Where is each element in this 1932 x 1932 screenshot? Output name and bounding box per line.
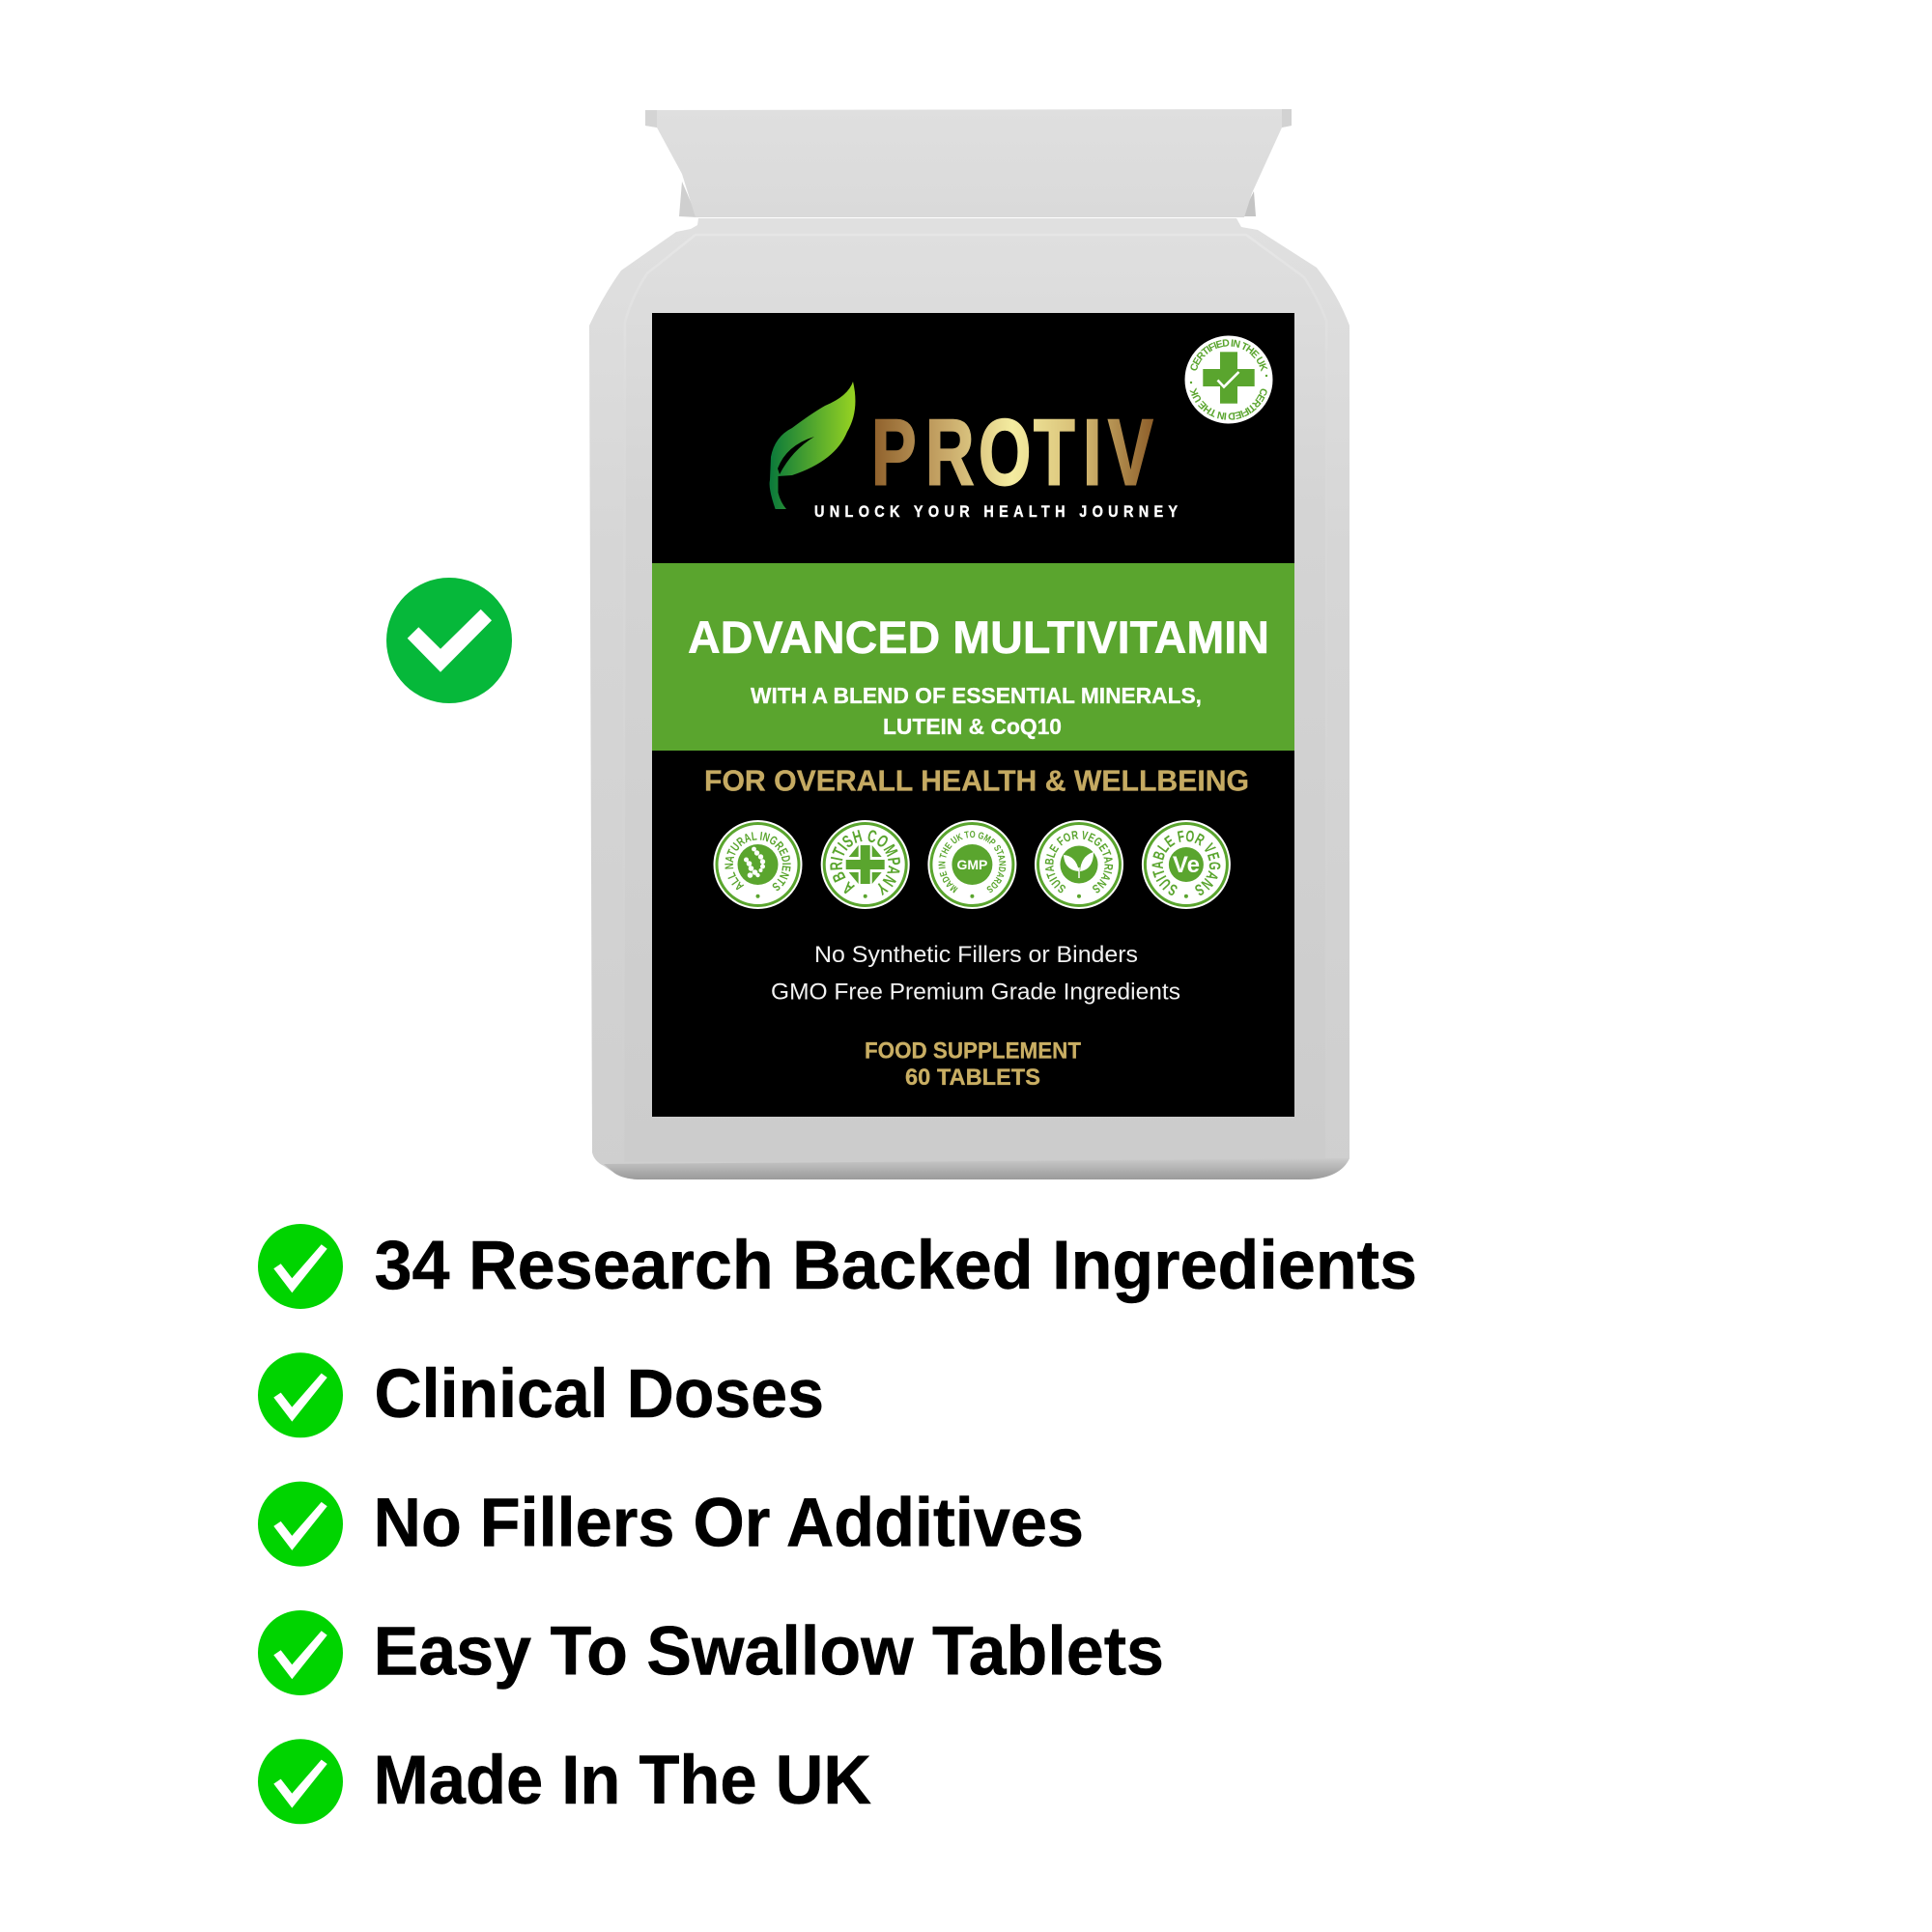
benefit: made in the uk: Made In The UK [373,1743,871,1819]
certified seal: CERTIFIED IN THE UK [1190,339,1267,372]
product bottle [589,109,1350,1179]
benefit: clinical doses [258,1352,824,1437]
product subtitle: LUTEIN & CoQ10 [883,714,1062,739]
claims text: GMO Free Premium Grade Ingredients [771,980,1180,1005]
seal: made in the uk to gmp standards [927,820,1016,909]
top check icon [386,578,512,703]
benefit: research backed ingredients: 34 Research Backed Ingredients [375,1228,1417,1304]
claims text: No Synthetic Fillers or Binders [814,942,1138,968]
product subtitle: WITH A BLEND OF ESSENTIAL MINERALS, [751,683,1202,708]
format text: 60 TABLETS [905,1065,1040,1091]
product name: ADVANCED MULTIVITAMIN [688,611,1269,663]
seal: made in the uk to gmp standards: GMP [956,857,987,872]
logo tagline: UNLOCK YOUR HEALTH JOURNEY [814,503,1179,521]
bottle label [652,313,1294,1117]
seal: a british company: A BRITISH COMPANY [830,830,900,896]
green band [652,563,1294,751]
certified seal [1184,336,1273,423]
logo wordmark: PROTIV [871,400,1153,504]
seal: all natural ingredients [713,820,802,909]
seal: all natural ingredients: ALL NATURAL INGREDIENTS [724,832,791,891]
benefit: easy to swallow tablets: Easy To Swallow Tablets [373,1613,1164,1690]
seal: suitable for vegans [1142,820,1231,909]
product subtitle [751,683,1202,739]
certified seal: CERTIFIED IN THE UK [1190,387,1267,420]
gold tagline: FOR OVERALL HEALTH & WELLBEING [704,765,1249,798]
claims text [771,942,1180,1005]
format text: FOOD SUPPLEMENT [865,1037,1081,1065]
seal: made in the uk to gmp standards: MADE IN THE UK TO GMP STANDARDS [939,831,1007,893]
seal: suitable for vegetarians: SUITABLE FOR VEGETARIANS [1045,831,1113,893]
seal: suitable for vegans: SUITABLE FOR VEGANS [1151,831,1221,895]
logo leaf [770,382,855,509]
seal: suitable for vegans: Ve [1173,852,1200,878]
benefit: no fillers or additives: No Fillers Or Additives [373,1486,1084,1561]
seal: suitable for vegetarians [1035,820,1123,909]
bottle body [589,218,1350,1179]
format text [865,1037,1081,1091]
benefit: clinical doses: Clinical Doses [375,1356,824,1433]
bottle cap [645,109,1292,217]
benefit list [258,1224,1417,1824]
